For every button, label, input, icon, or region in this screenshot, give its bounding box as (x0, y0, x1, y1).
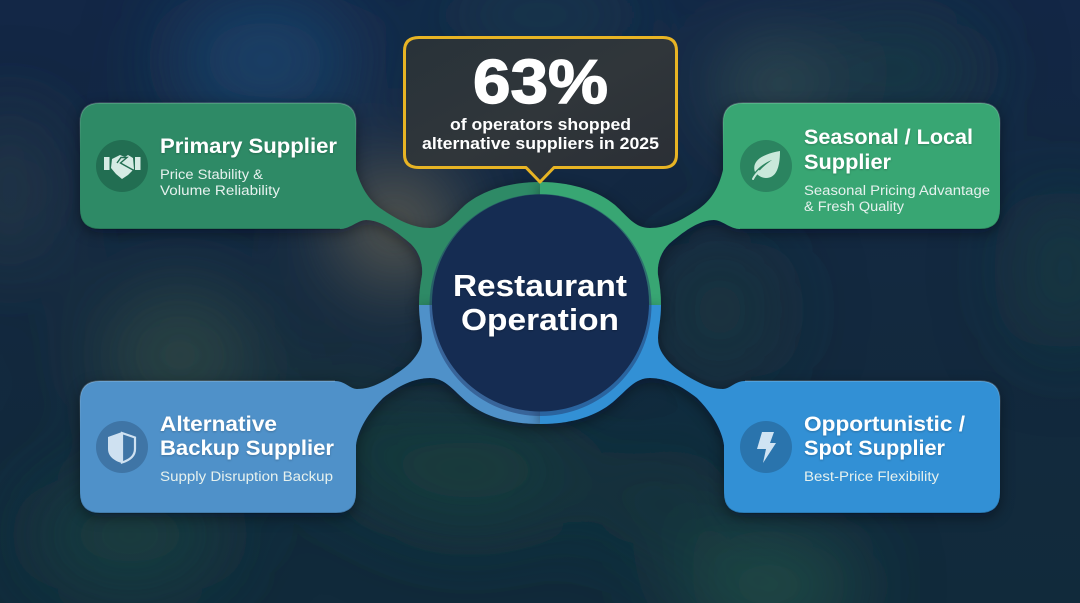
title: Seasonal / Local Supplier (804, 126, 973, 174)
title: Alternative Backup Supplier (160, 413, 334, 460)
panel: Primary Supplier (80, 103, 540, 305)
text: Supply Disruption Backup: Supply Disruption Backup (160, 469, 333, 484)
title: Seasonal / Local Supplier: Seasonal / Local (804, 126, 973, 149)
center label: Restaurant (453, 268, 627, 303)
panel: Alternative Backup Supplier (80, 305, 540, 513)
title: Seasonal / Local Supplier: Supplier (804, 151, 891, 174)
center label: Operation (461, 302, 619, 337)
icon: handshake (96, 140, 148, 192)
center label (453, 268, 627, 337)
text: Seasonal Pricing Advantage and Fresh Quality: & Fresh Quality (804, 199, 904, 214)
text: Seasonal Pricing Advantage and Fresh Quality: Seasonal Pricing Advantage (804, 183, 990, 198)
title: Alternative Backup Supplier: Backup Supplier (160, 437, 334, 460)
icon: leaf (740, 140, 792, 192)
callout text: alternative suppliers in 2025 (422, 135, 659, 153)
title: Alternative Backup Supplier: Alternative (160, 413, 277, 436)
big number: 63% (473, 48, 608, 117)
text: Price Stability and Volume Reliability: Volume Reliability (160, 183, 280, 198)
callout text (422, 116, 659, 153)
text: Seasonal Pricing Advantage and Fresh Quality (804, 183, 990, 214)
text: Price Stability and Volume Reliability: Price Stability & (160, 167, 263, 182)
panel: Seasonal / Local Supplier (540, 103, 1000, 305)
title: Opportunistic / Spot Supplier: Spot Supplier (804, 437, 945, 460)
icon: lightning bolt (740, 421, 792, 473)
text: Best-Price Flexibility: Best-Price Flexibility (804, 469, 939, 484)
panel: Opportunistic / Spot Supplier (540, 305, 1000, 513)
center circle: Restaurant Operation (430, 194, 652, 416)
title: Primary Supplier: Primary Supplier (160, 135, 337, 158)
title: Opportunistic / Spot Supplier: Opportunistic / (804, 413, 965, 436)
callout: 63% statistic (404, 38, 676, 182)
title: Opportunistic / Spot Supplier (804, 413, 965, 460)
text: Price Stability and Volume Reliability (160, 167, 280, 198)
icon: shield (96, 421, 148, 473)
callout text: of operators shopped (450, 116, 631, 134)
